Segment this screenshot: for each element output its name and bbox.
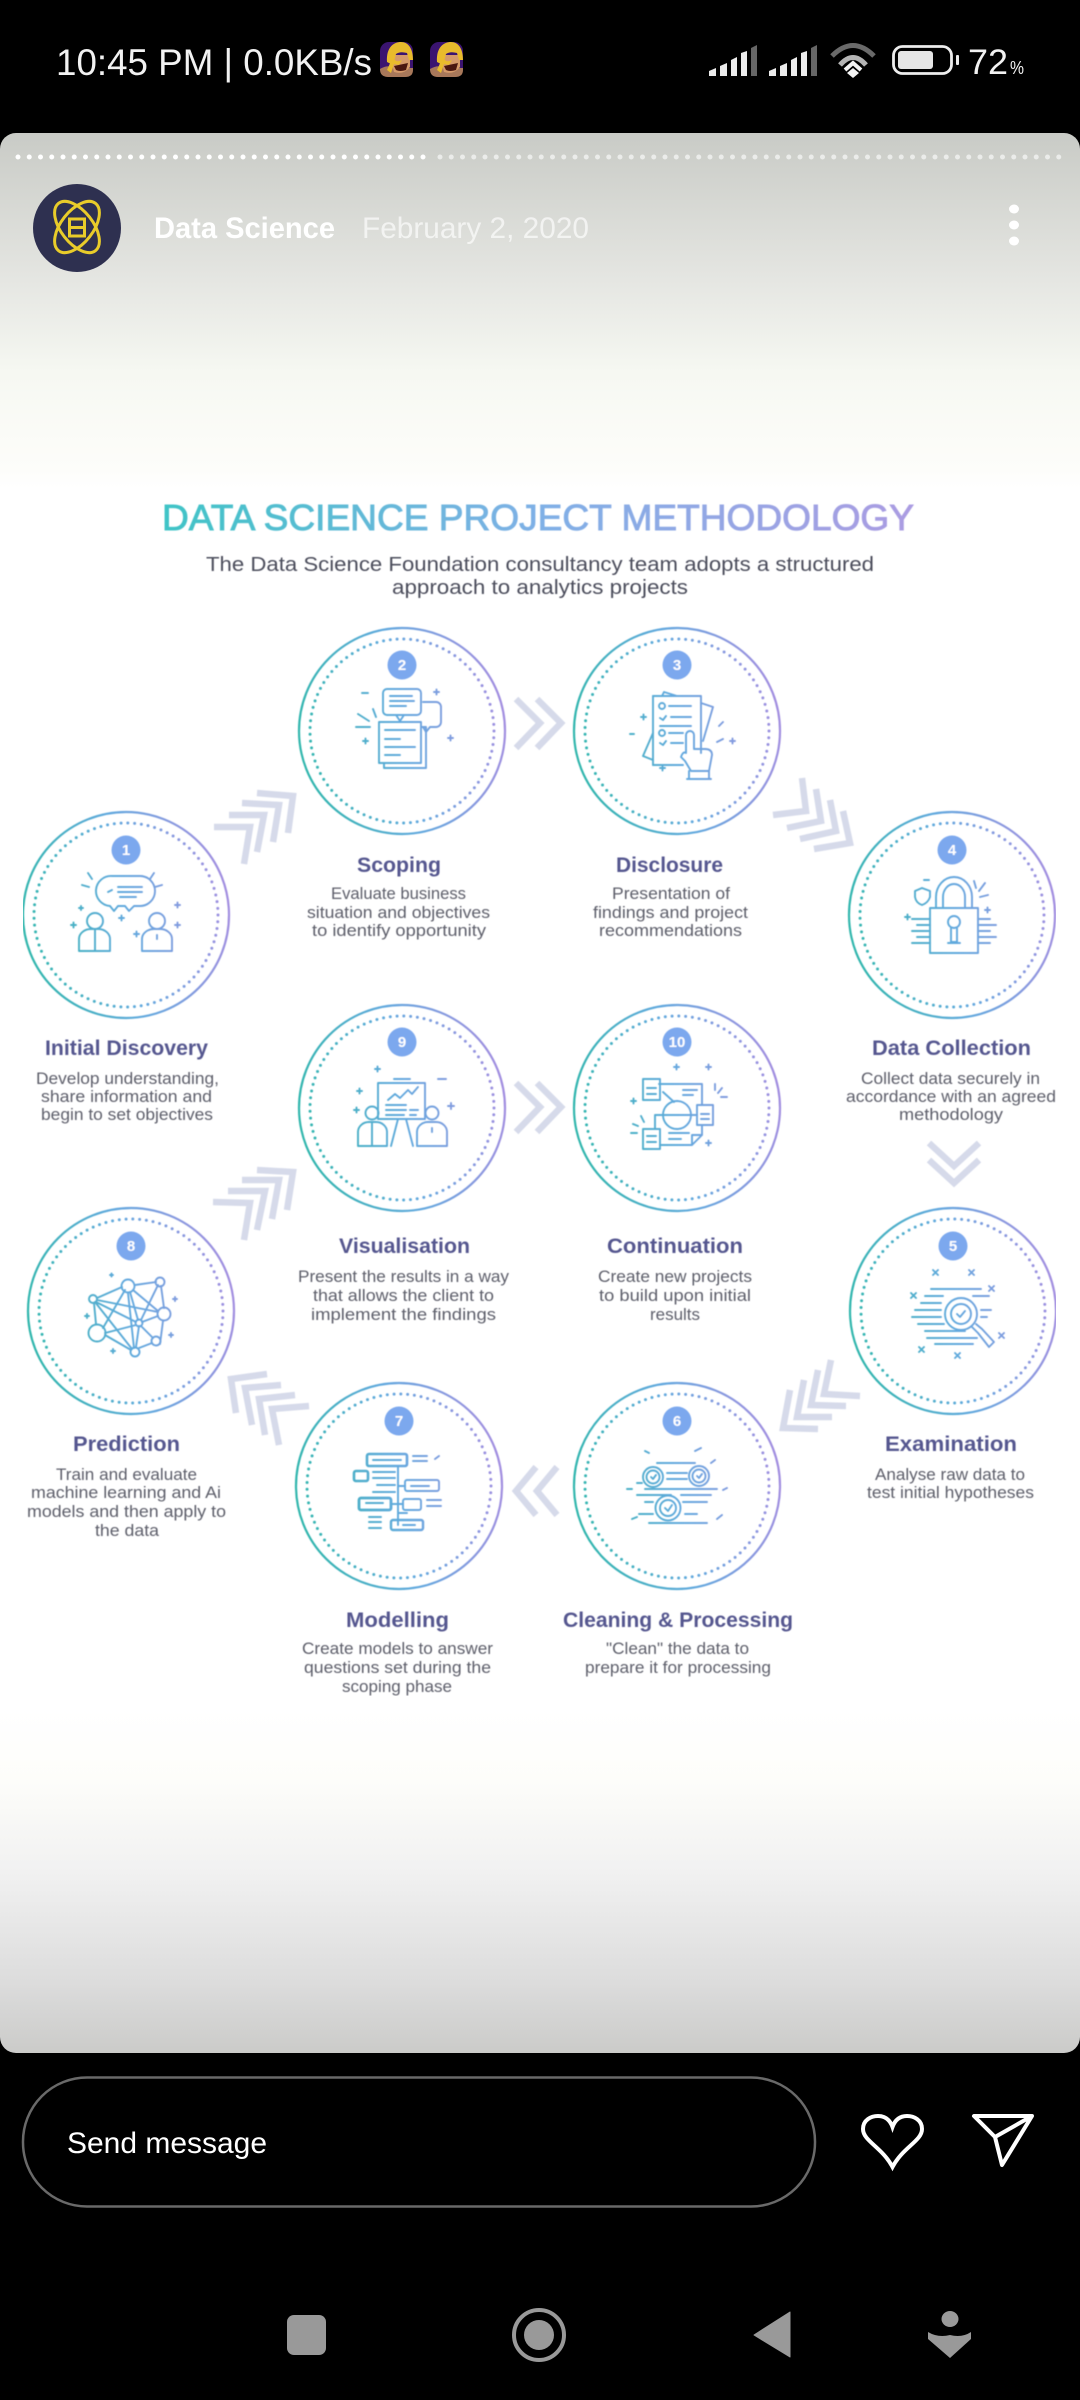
icon: heart [863, 2116, 922, 2167]
description [27, 1466, 226, 1540]
title: DATA SCIENCE PROJECT METHODOLOGY [162, 497, 914, 538]
description: findings and project [593, 904, 748, 922]
heading: Disclosure [616, 854, 723, 877]
description: Collect data securely in [861, 1070, 1040, 1088]
description [298, 1268, 510, 1324]
description: prepare it for processing [585, 1659, 771, 1677]
description [867, 1466, 1034, 1502]
icon: back [754, 2312, 790, 2357]
step 3 badge ring and icon [574, 628, 780, 834]
send message field [23, 2078, 815, 2206]
description: accordance with an agreed [846, 1088, 1056, 1106]
step 9 badge ring and icon: 9 [398, 1034, 406, 1051]
description: share information and [41, 1088, 212, 1106]
description: scoping phase [342, 1678, 452, 1696]
description: to identify opportunity [312, 922, 487, 940]
description [846, 1070, 1056, 1124]
send message placeholder: Send message [67, 2127, 267, 2160]
description: "Clean" the data to [606, 1640, 749, 1658]
step 2 badge ring and icon [299, 628, 505, 834]
step 10 badge ring and icon [574, 1005, 780, 1211]
description: Analyse raw data to [875, 1466, 1025, 1484]
icon: wifi [832, 46, 874, 78]
panel: step 1 initial discovery [23, 812, 229, 1124]
description: test initial hypotheses [867, 1484, 1034, 1502]
heading: Examination [885, 1433, 1017, 1456]
description: Evaluate business [331, 885, 466, 903]
arrow: step 1 to 2 [214, 793, 293, 864]
arrow: step 2 to 3 [516, 699, 561, 748]
step 1 badge ring and icon [23, 812, 229, 1018]
story header [33, 184, 1019, 272]
step 6 badge ring and icon: 6 [673, 1413, 681, 1430]
story panel [0, 133, 1080, 2053]
step 8 badge ring and icon [28, 1208, 234, 1414]
step 5 badge ring and icon [850, 1208, 1056, 1414]
icon: battery [894, 46, 959, 74]
step 6 badge ring and icon [574, 1383, 780, 1589]
step 2 badge ring and icon: 2 [398, 657, 406, 674]
description: Train and evaluate [56, 1466, 197, 1484]
arrow: step 6 to 7 [516, 1467, 557, 1515]
description: recommendations [599, 922, 742, 940]
infographic [23, 497, 1056, 1696]
panel: step 5 examination [850, 1208, 1056, 1502]
icon: game notification 2 [430, 42, 463, 77]
panel: step 3 disclosure [574, 628, 780, 940]
icon: more menu [1009, 204, 1019, 246]
description: the data [95, 1522, 160, 1540]
status time and network speed: 10:45 PM | 0.0KB/s [56, 42, 372, 83]
description: implement the findings [311, 1306, 496, 1324]
description: questions set during the [304, 1659, 491, 1677]
description: Presentation of [612, 885, 730, 903]
message bar [23, 2078, 1032, 2206]
battery percentage: % [1010, 58, 1024, 78]
description: Present the results in a way [298, 1268, 510, 1286]
icon: recent apps [287, 2315, 326, 2355]
description [585, 1640, 771, 1677]
panel: step 4 data collection [846, 812, 1056, 1124]
battery percentage [968, 43, 1024, 82]
description [302, 1640, 494, 1696]
heading: Continuation [607, 1235, 743, 1258]
post date: February 2, 2020 [362, 212, 589, 245]
arrow: step 3 to 4 [773, 778, 850, 849]
battery percentage: 72 [968, 43, 1008, 82]
heading: Data Collection [872, 1037, 1031, 1060]
subtitle [206, 553, 874, 599]
heading: Cleaning & Processing [563, 1609, 793, 1632]
step 8 badge ring and icon: 8 [127, 1238, 135, 1255]
arrow: step 9 to 10 [516, 1083, 561, 1132]
icon: assistant [928, 2311, 971, 2358]
panel: step 8 prediction [27, 1208, 234, 1540]
story progress dots [18, 154, 1064, 160]
heading: Visualisation [339, 1235, 470, 1258]
arrow: step 8 to 9 [213, 1170, 293, 1240]
step 7 badge ring and icon: 7 [395, 1413, 403, 1430]
step 4 badge ring and icon: 4 [948, 842, 957, 859]
arrow: step 5 to 6 [783, 1360, 860, 1429]
description: Create models to answer [302, 1640, 494, 1658]
arrow: step 4 to 5 [929, 1143, 979, 1183]
icon: channel avatar [33, 184, 121, 272]
description: begin to set objectives [41, 1106, 213, 1124]
heading: Modelling [346, 1609, 449, 1632]
icon: game notification 1 [380, 42, 413, 77]
heading: Scoping [357, 854, 441, 877]
subtitle: approach to analytics projects [392, 576, 688, 599]
description: Develop understanding, [36, 1070, 219, 1088]
panel: step 6 cleaning and processing [563, 1383, 793, 1677]
step 3 badge ring and icon: 3 [673, 657, 681, 674]
description: models and then apply to [27, 1503, 226, 1521]
step 9 badge ring and icon [299, 1005, 505, 1211]
heading: Initial Discovery [45, 1037, 208, 1060]
description: Create new projects [598, 1268, 752, 1286]
navigation bar [287, 2310, 971, 2360]
step 1 badge ring and icon: 1 [122, 842, 130, 859]
description: machine learning and Ai [31, 1484, 221, 1502]
panel: step 7 modelling [296, 1383, 502, 1696]
step 10 badge ring and icon: 10 [669, 1034, 685, 1051]
panel: step 2 scoping [299, 628, 505, 940]
description [307, 885, 490, 940]
arrow: step 7 to 8 [231, 1374, 309, 1445]
panel: step 10 continuation [574, 1005, 780, 1324]
step 7 badge ring and icon [296, 1383, 502, 1589]
panel: step 9 visualisation [298, 1005, 510, 1324]
status bar [56, 42, 1024, 83]
description: to build upon initial [599, 1287, 751, 1305]
subtitle: The Data Science Foundation consultancy team adopts a structured [206, 553, 874, 576]
description [36, 1070, 219, 1124]
icon: paper plane [974, 2116, 1032, 2165]
channel name: Data Science [154, 212, 335, 245]
description: that allows the client to [313, 1287, 494, 1305]
step 5 badge ring and icon: 5 [949, 1238, 957, 1255]
description: situation and objectives [307, 904, 490, 922]
step 4 badge ring and icon [849, 812, 1055, 1018]
description [593, 885, 748, 940]
heading: Prediction [73, 1433, 180, 1456]
description: results [650, 1306, 700, 1324]
description: methodology [899, 1106, 1004, 1124]
description [598, 1268, 752, 1324]
icon: home [514, 2310, 564, 2360]
icon: signal 2 [769, 45, 817, 76]
icon: signal 1 [709, 45, 757, 76]
